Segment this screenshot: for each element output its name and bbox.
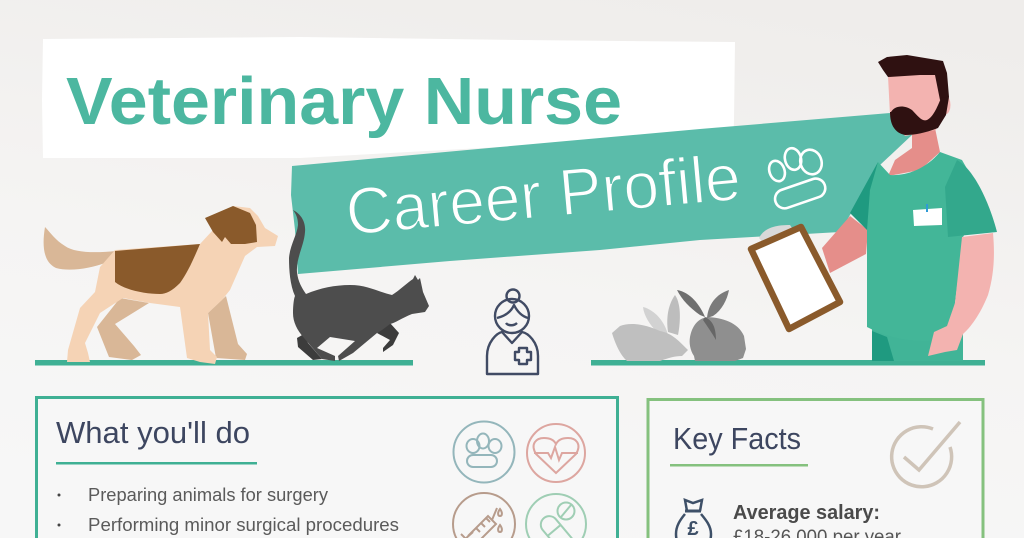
bullet list [58,485,399,535]
vet left sleeve shade [850,162,878,230]
ribbon text: career profile: Career Profile [343,139,744,249]
icon: syringe circle [453,493,515,538]
vet hand holding clipboard [759,225,795,245]
light rabbit far ear [667,295,680,335]
icon: nurse [487,290,538,374]
vet ear [942,96,950,114]
cat illustration [289,210,429,361]
vet neck [888,128,940,176]
dark rabbit right ear [707,290,729,318]
career profile ribbon [291,113,912,274]
vet far arm [822,216,868,273]
vet name badge [913,208,942,226]
dark rabbit left ear [677,290,705,317]
dog far hind leg [97,298,149,360]
average salary label: Average salary: [733,502,880,524]
dog far front leg [208,296,247,360]
icon: paw on ribbon [766,146,828,211]
light rabbit body [612,324,688,361]
vet trouser shade [872,331,894,361]
heading underline [56,462,257,464]
clipboard [751,225,840,329]
vet badge pin [926,204,928,212]
dark rabbit body [690,317,746,361]
panel frame [648,400,983,538]
icon: money bag [676,500,711,538]
panel: what you'll do [36,398,618,538]
rabbits [612,290,746,361]
heading underline [670,464,808,466]
ground line right [591,360,985,366]
dog saddle patch [115,244,200,294]
bullet list: Preparing animals for surgery [88,485,328,505]
title: Veterinary Nurse [66,64,622,139]
title banner background [42,37,735,158]
vet beard [890,97,949,135]
dog ear [205,206,257,244]
dog tail [44,227,116,270]
vet hair [878,55,949,100]
vet near arm [928,233,994,356]
vet face [888,74,943,136]
cat far legs [297,323,399,360]
dog body [67,206,278,364]
panel: key facts [648,400,983,538]
vet illustration [822,55,997,361]
dog illustration [44,206,278,364]
icon: pills circle [526,494,586,538]
vet right sleeve [945,160,997,237]
cat body and tail [289,210,429,361]
heading: what you'll do: What you'll do [56,415,250,450]
icon: check mark [892,422,960,487]
ground line left [35,360,413,366]
clipboard board [751,227,840,329]
heading: key facts: Key Facts [673,421,801,456]
vet scrub top [867,152,985,341]
bullet list: Performing minor surgical procedures [88,515,399,535]
icon: heart circle [527,424,585,482]
icon: paw circle [454,422,514,482]
dark rabbit head fold [703,317,716,340]
vet trousers [872,328,963,361]
light rabbit ears [643,307,668,335]
panel frame [36,398,618,538]
